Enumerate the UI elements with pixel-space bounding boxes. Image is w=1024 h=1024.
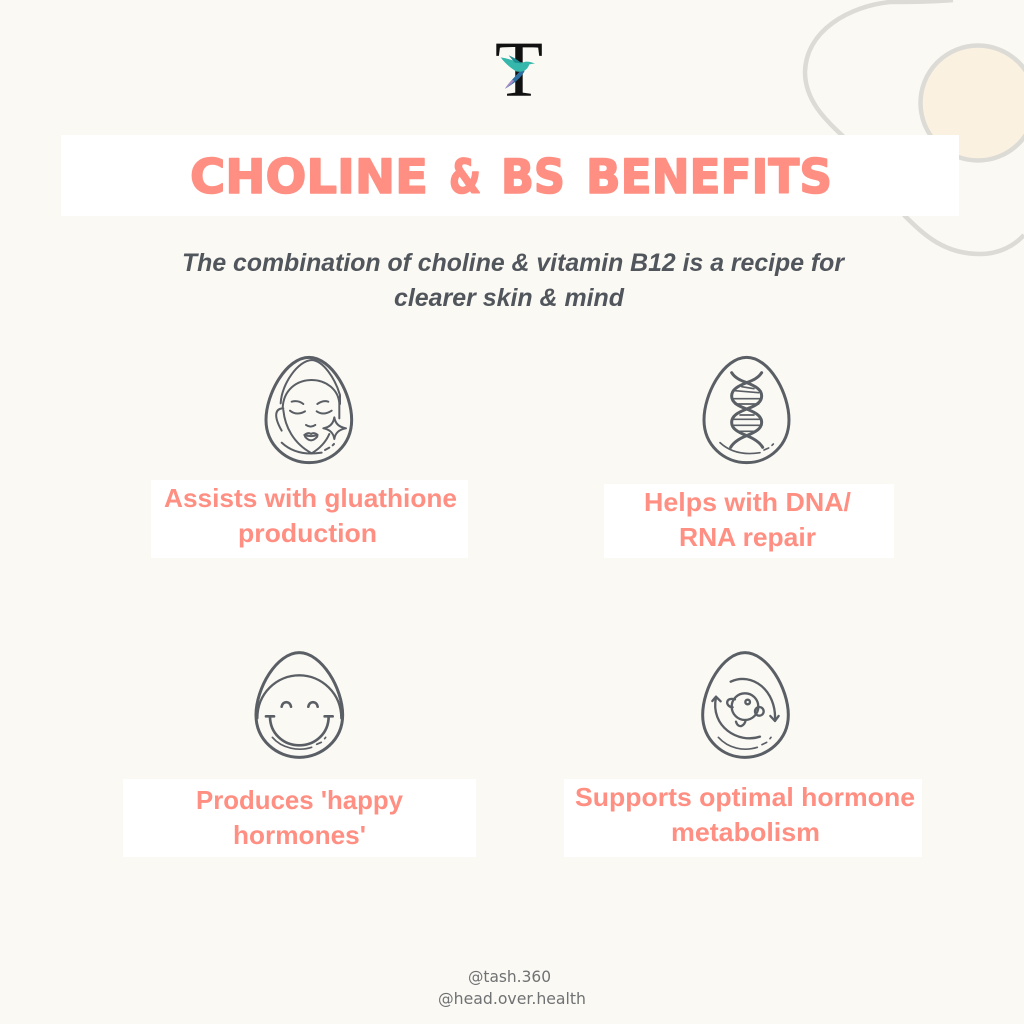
label: hormone metabolism bbox=[564, 779, 922, 857]
label: gluathione: Assists with gluathione bbox=[164, 483, 457, 513]
subtitle bbox=[182, 249, 845, 312]
title: BENEFITS bbox=[586, 150, 832, 205]
title: & bbox=[449, 150, 481, 205]
title bbox=[190, 150, 832, 205]
footer handles: @head.over.health bbox=[438, 989, 586, 1008]
label: gluathione bbox=[151, 480, 468, 558]
logo: T with hummingbird: T bbox=[495, 27, 543, 114]
icon: metabolism egg bbox=[703, 653, 788, 757]
label: DNA repair: RNA repair bbox=[679, 522, 816, 552]
label: happy hormones bbox=[123, 779, 476, 857]
icon: face egg bbox=[266, 357, 352, 463]
footer handles bbox=[438, 967, 586, 1008]
label: DNA repair: Helps with DNA/ bbox=[644, 487, 851, 517]
title: CHOLINE bbox=[190, 150, 428, 205]
label: happy hormones: hormones' bbox=[233, 820, 366, 850]
label: hormone metabolism: metabolism bbox=[671, 817, 820, 847]
subtitle: clearer skin & mind bbox=[394, 284, 625, 312]
subtitle: The combination of choline & vitamin B12 is a recipe for bbox=[182, 249, 845, 277]
title: BS bbox=[501, 150, 565, 205]
icon: DNA egg bbox=[704, 357, 789, 463]
decoration: fried egg bbox=[805, 0, 1024, 254]
label: DNA repair bbox=[604, 484, 894, 558]
label: hormone metabolism: Supports optimal hormone bbox=[575, 782, 915, 812]
label: gluathione: production bbox=[238, 518, 377, 548]
label: happy hormones: Produces 'happy bbox=[196, 785, 404, 815]
icon: smiling egg bbox=[256, 653, 343, 757]
footer handles: @tash.360 bbox=[468, 967, 551, 986]
title banner bbox=[61, 135, 959, 216]
